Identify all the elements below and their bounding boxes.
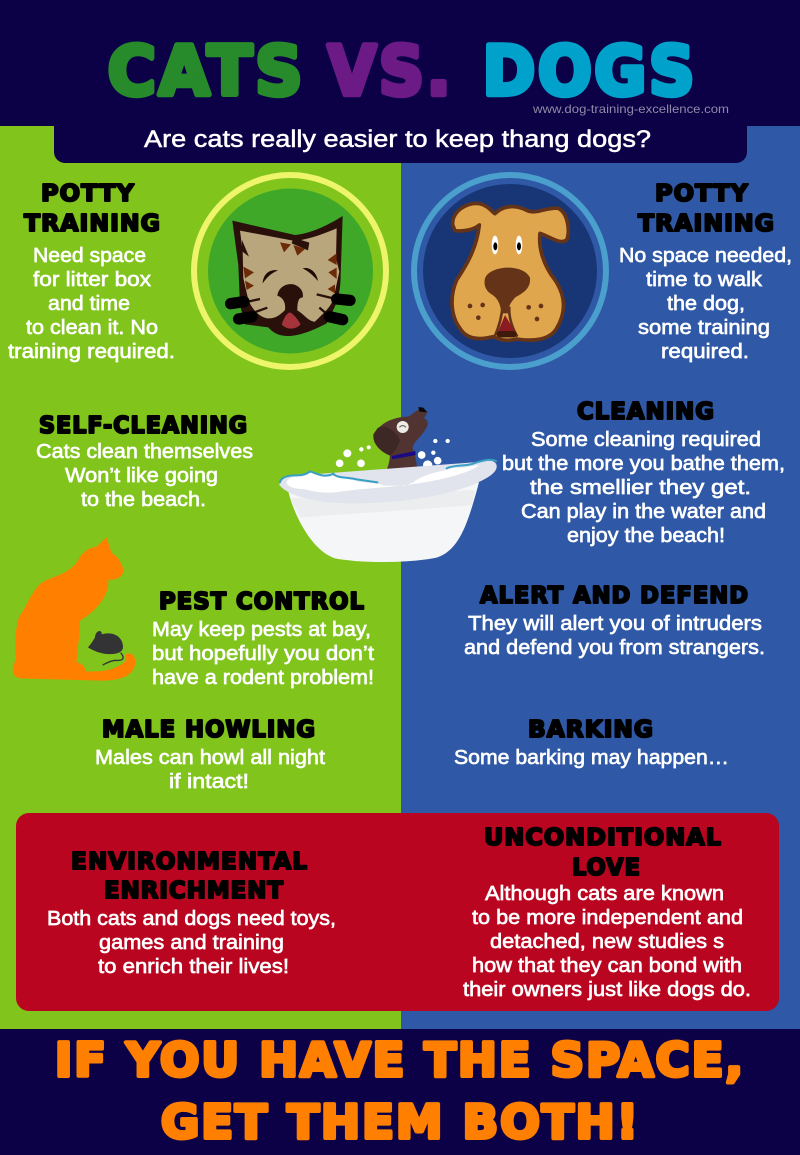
text block: Some barking may happen… (454, 747, 729, 769)
panel: dogs background (401, 120, 800, 1035)
text block: have a rodent problem! (152, 667, 374, 689)
heading (71, 849, 308, 904)
heading: POTTY (655, 181, 749, 207)
section: male howling (95, 717, 325, 793)
text block: training required. (8, 341, 175, 363)
section: unconditional love (463, 825, 751, 1001)
title: CATS (108, 32, 305, 111)
heading (24, 181, 161, 237)
text block: Males can howl all night (95, 747, 325, 769)
heading: BARKING (528, 717, 654, 743)
text block: Need space (33, 245, 146, 267)
section: barking (454, 717, 729, 769)
text block: Cats clean themselves (36, 441, 253, 463)
mouse (88, 631, 123, 665)
text block: Some cleaning required (531, 429, 761, 451)
panel: cats background (0, 120, 401, 1035)
heading: PEST CONTROL (159, 589, 365, 615)
footer band (0, 1029, 800, 1155)
text block: games and training (99, 932, 284, 954)
section: pest control (152, 589, 374, 689)
text block (463, 883, 751, 1001)
text block: They will alert you of intruders (468, 613, 762, 635)
text block: their owners just like dogs do. (463, 979, 751, 1001)
heading: CLEANING (577, 399, 715, 425)
text block: the dog, (667, 293, 745, 315)
section: self-cleaning (36, 413, 253, 511)
text block: to enrich their lives! (98, 956, 289, 978)
text block: Can play in the water and (521, 501, 766, 523)
footer headline: IF YOU HAVE THE SPACE, (55, 1033, 745, 1087)
text block: to the beach. (81, 489, 206, 511)
text block (152, 619, 374, 689)
text block: to clean it. No (26, 317, 158, 339)
icon: cat face badge (194, 175, 386, 367)
text block: the smellier they get. (530, 477, 751, 499)
website url: www.dog-training-excellence.com (532, 102, 729, 116)
heading: TRAINING (24, 211, 161, 237)
text block (502, 429, 785, 547)
text block: and time (48, 293, 130, 315)
text block: to be more independent and (472, 907, 743, 929)
text block: some training (638, 317, 770, 339)
text block: for litter box (33, 269, 151, 291)
heading: TRAINING (638, 211, 775, 237)
icon: dog in bathtub (279, 407, 497, 562)
text block (8, 245, 175, 363)
section: cat potty training (8, 181, 175, 363)
heading: MALE HOWLING (102, 717, 316, 743)
text block: but the more you bathe them, (502, 453, 785, 475)
text block (464, 613, 765, 659)
text block: detached, new studies s (490, 931, 724, 953)
text block (619, 245, 792, 363)
text block: but hopefully you don’t (152, 643, 374, 665)
icon: orange cat with mouse (13, 537, 135, 681)
heading: SELF-CLEANING (39, 413, 248, 439)
heading: LOVE (572, 855, 641, 881)
heading: ALERT AND DEFEND (480, 583, 749, 609)
heading (484, 825, 722, 881)
text block: required. (661, 341, 749, 363)
heading: UNCONDITIONAL (484, 825, 722, 851)
text block: if intact! (169, 771, 249, 793)
heading: POTTY (41, 181, 135, 207)
section: environmental enrichment (47, 849, 336, 978)
text block (95, 747, 325, 793)
footer headline (55, 1033, 745, 1149)
title: DOGS (483, 32, 697, 111)
text block: enjoy the beach! (567, 525, 725, 547)
text block: May keep pests at bay, (152, 619, 371, 641)
title: VS. (328, 32, 453, 111)
heading (638, 181, 775, 237)
text block: Both cats and dogs need toys, (47, 908, 336, 930)
footer headline: GET THEM BOTH! (161, 1095, 640, 1149)
subtitle: Are cats really easier to keep thang dogs? (144, 126, 651, 153)
text block: how that they can bond with (472, 955, 742, 977)
icon: dog face badge (414, 175, 606, 367)
text block: and defend you from strangers. (464, 637, 765, 659)
panel: shared needs (16, 813, 779, 1011)
text block: No space needed, (619, 245, 792, 267)
section: dog potty training (619, 181, 792, 363)
heading: ENRICHMENT (104, 878, 284, 904)
text block: Although cats are known (485, 883, 724, 905)
title (108, 32, 697, 111)
section: alert and defend (464, 583, 765, 659)
text block (36, 441, 253, 511)
header band (0, 0, 800, 163)
section: cleaning (502, 399, 785, 547)
cat silhouette (13, 537, 135, 681)
text block: time to walk (646, 269, 763, 291)
text block: Won’t like going (65, 465, 218, 487)
text block (47, 908, 336, 978)
heading: ENVIRONMENTAL (71, 849, 308, 875)
